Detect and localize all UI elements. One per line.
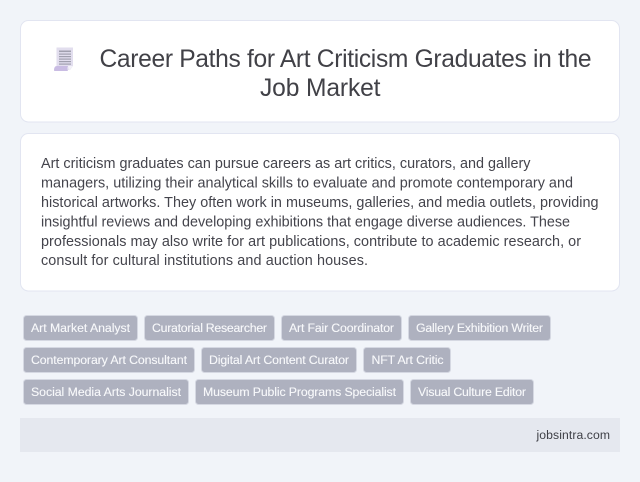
tag [202, 348, 356, 372]
title: Job Market [260, 75, 381, 102]
tag [144, 316, 274, 340]
footer: source: jobsintra.com [536, 428, 610, 442]
title [100, 46, 592, 102]
tag: Digital Art Content Curator [209, 353, 349, 367]
tag: NFT Art Critic [372, 353, 444, 367]
tag [282, 316, 402, 340]
panel: description [20, 134, 620, 291]
tag [24, 348, 194, 372]
footer [20, 418, 620, 452]
tag [408, 316, 550, 340]
text block: description: historical artworks. They often work in museums, galleries, and media outlets, providing [41, 195, 598, 211]
panel: header [20, 20, 620, 122]
icon: scroll [54, 48, 73, 71]
tag: Contemporary Art Consultant [31, 353, 188, 367]
tag: Art Fair Coordinator [289, 321, 394, 335]
text block: description: managers, utilizing their analytical skills to evaluate and promote contemporary and [41, 176, 573, 192]
tag: Social Media Arts Journalist [31, 385, 182, 399]
tag [364, 348, 450, 372]
title: Career Paths for Art Criticism Graduates in the [100, 46, 592, 73]
text block: description: professionals may also write for art publications, contribute to academic research, or [41, 234, 581, 250]
tag: Museum Public Programs Specialist [203, 385, 397, 399]
tags: career list [24, 316, 550, 404]
tag [24, 316, 138, 340]
text block: description: consult for cultural institutions and auction houses. [41, 253, 368, 269]
text block: description: insightful reviews and developing exhibitions that engage diverse audiences. These [41, 214, 570, 230]
text block: description: Art criticism graduates can pursue careers as art critics, curators, and gallery [41, 156, 531, 172]
text block: description [41, 156, 598, 269]
tag [24, 380, 188, 404]
tag [196, 380, 404, 404]
tag [410, 380, 534, 404]
tag: Gallery Exhibition Writer [416, 321, 543, 335]
tag: Curatorial Researcher [152, 321, 267, 335]
tag: Art Market Analyst [31, 321, 131, 335]
tag: Visual Culture Editor [418, 385, 526, 399]
